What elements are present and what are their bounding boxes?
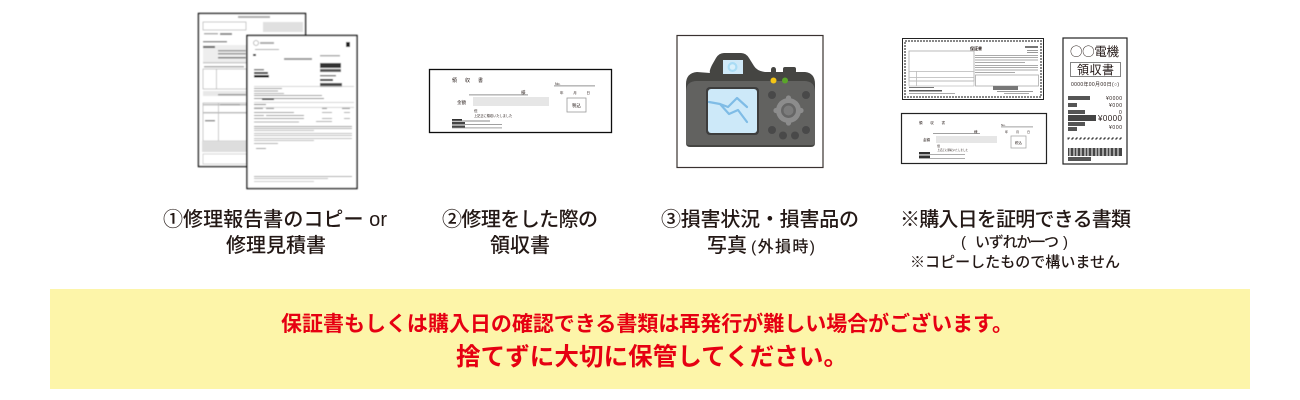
document: receipt for repair: 上記正に領収いたしました (474, 113, 512, 118)
caption 4: いずれか一つ (975, 234, 1059, 251)
document: store receipt: ○○電機 (1070, 41, 1119, 60)
back sheet: repair report (198, 14, 306, 166)
caption 4: ※コピーしたもので構いません (910, 253, 1120, 271)
document: receipt small: 領 収 書 (919, 120, 946, 125)
caption 3: ③損害状況・損害品の (661, 208, 859, 231)
document: store receipt: ¥000 (1109, 103, 1122, 109)
caption 2: ②修理をした際の (442, 208, 598, 231)
document: receipt for repair: 年 月 日 (560, 90, 590, 95)
caption 4: ) (1063, 234, 1068, 251)
caption 2: 領収書 (490, 234, 550, 257)
document: receipt small: 様 (974, 129, 978, 134)
caption 4 (900, 208, 1131, 271)
notice banner (50, 289, 1250, 389)
caption 1: ①修理報告書のコピー or (163, 208, 387, 231)
icon: camera (686, 53, 815, 147)
caption 3: (外損時) (751, 238, 815, 256)
caption 2 (442, 208, 598, 257)
document: receipt for repair: 金額 (457, 99, 466, 106)
document: receipt small (902, 114, 1046, 164)
document: receipt for repair (430, 70, 612, 132)
document: repair report and estimate (198, 14, 357, 188)
front sheet: estimate (247, 36, 357, 188)
document: store receipt: ¥0000 (1106, 96, 1122, 102)
caption 3 (661, 208, 859, 257)
document: receipt small: 但 (937, 143, 940, 148)
photo: camera in a frame (677, 36, 823, 168)
document: receipt small: 金額 (923, 137, 930, 142)
document: store receipt: ¥0000 (1097, 114, 1123, 123)
controls (768, 91, 810, 140)
document: receipt for repair: 領 収 書 (452, 77, 483, 84)
caption 4: ※購入日を証明できる書類 (900, 208, 1131, 231)
document: store receipt (1063, 38, 1127, 164)
document: receipt small: 年 月 日 (1005, 129, 1030, 134)
document: receipt for repair: No. (555, 82, 560, 86)
document: receipt small: No. (1001, 123, 1006, 127)
notice line 2: 捨てずに大切に保管してください。 (456, 343, 848, 371)
document: receipt for repair: 様 (521, 89, 526, 95)
caption 1: 修理見積書 (226, 234, 326, 257)
document: receipt small: 上記正に領収いたしました (937, 148, 969, 152)
document: warranty card (902, 38, 1044, 100)
document: receipt small: 税込 (1015, 140, 1022, 145)
document: warranty card: 保証書 (970, 45, 982, 51)
document: store receipt: 0 (1119, 110, 1122, 116)
screen (706, 87, 759, 135)
document: receipt for repair: 但 (474, 108, 478, 113)
document: store receipt: ¥000 (1109, 125, 1122, 131)
document: store receipt: 領収書 (1077, 63, 1114, 77)
document: store receipt: 0000年00月00日(○) (1071, 81, 1119, 88)
caption 1 (163, 208, 387, 257)
barcode (1068, 148, 1122, 156)
caption 3: 写真 (707, 234, 747, 257)
notice line 1: 保証書もしくは購入日の確認できる書類は再発行が難しい場合がございます。 (281, 312, 1013, 336)
caption 4: ( (961, 234, 966, 251)
document: receipt for repair: 税込 (572, 102, 581, 109)
